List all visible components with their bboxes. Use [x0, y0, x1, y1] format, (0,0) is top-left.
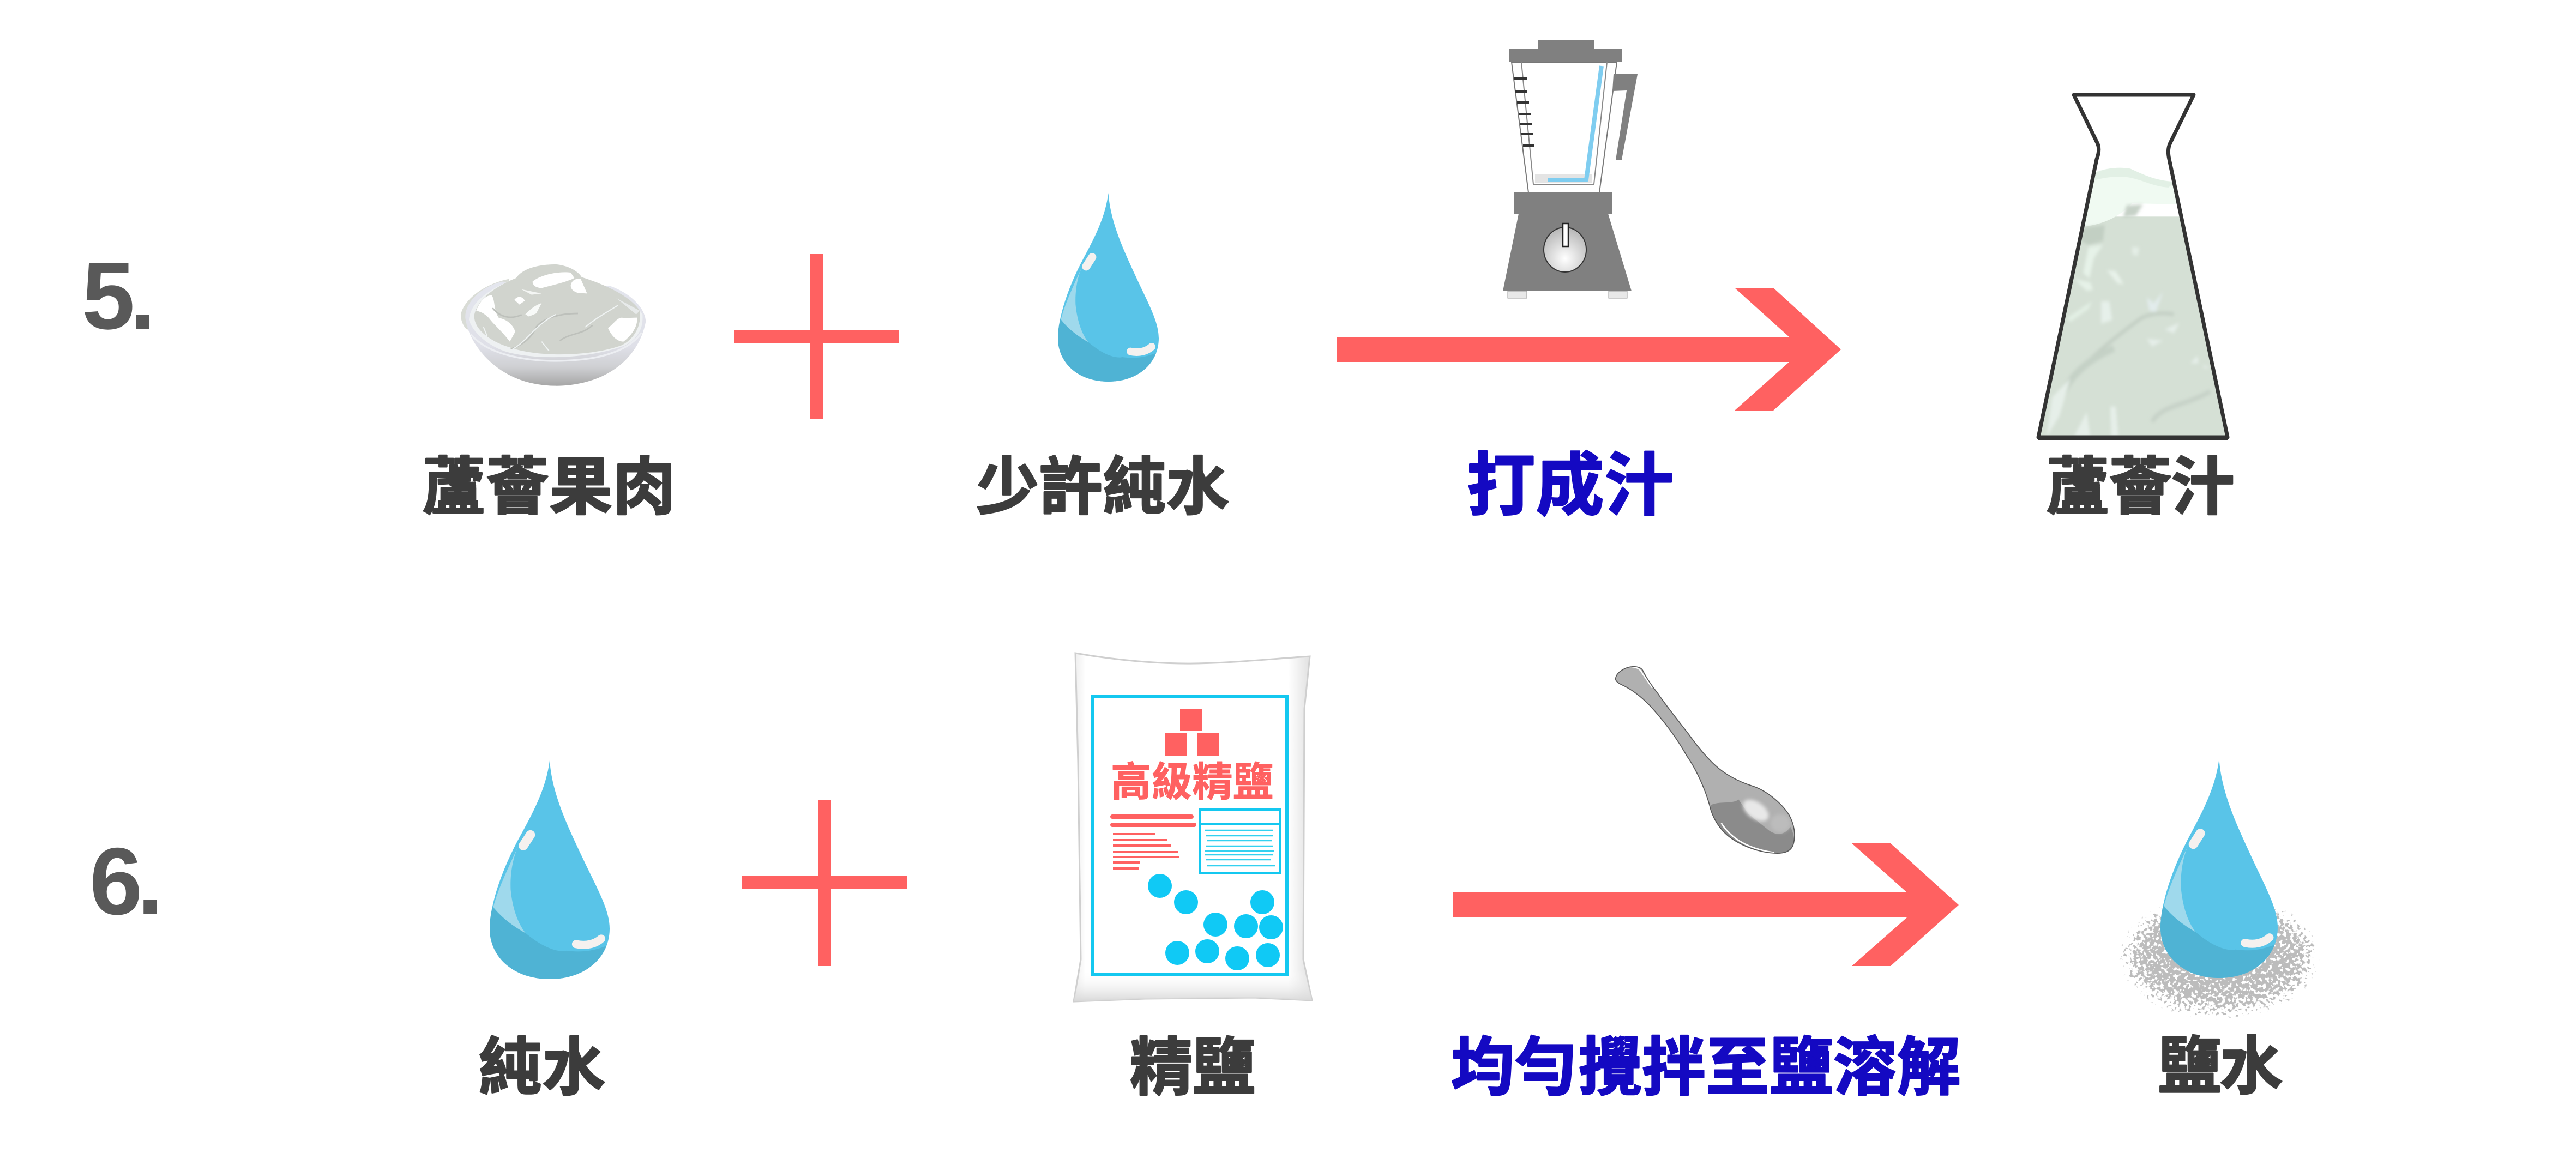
label: refined salt: 精鹽 — [1130, 1033, 1255, 1103]
icon: blender — [1503, 40, 1638, 298]
ingredient: aloe flesh in bowl — [461, 264, 646, 386]
arrow row 6 — [1453, 843, 1959, 966]
bag label frame — [1092, 697, 1287, 975]
plus sign row 5 — [734, 254, 899, 419]
icon: spoon — [1616, 667, 1795, 853]
label: blend into juice: 打成汁 — [1467, 448, 1673, 524]
label: aloe juice: 蘆薈汁 — [2047, 452, 2234, 522]
label: salt water: 鹽水 — [2158, 1032, 2283, 1102]
water drop — [2159, 759, 2279, 980]
step number 6: 6. — [89, 829, 164, 935]
step number 5: 5. — [82, 243, 156, 349]
red text lines — [1112, 817, 1194, 868]
plus sign row 6 — [742, 800, 907, 966]
water drop row 5 — [1057, 193, 1160, 383]
info box — [1200, 810, 1280, 873]
bag title: 高級精鹽 — [1111, 759, 1273, 805]
salt pile — [2116, 892, 2323, 1021]
blue dots — [1148, 874, 1283, 970]
water drop row 6 — [489, 760, 611, 981]
label: stir until salt dissolves: 均勻攪拌至鹽溶解 — [1451, 1032, 1960, 1103]
icon: salt bag — [1074, 653, 1312, 1001]
label: pure water: 純水 — [479, 1033, 605, 1103]
salt water: salt pile with drop — [2116, 759, 2323, 1021]
arrow row 5 — [1337, 288, 1841, 411]
label: a little pure water: 少許純水 — [976, 452, 1229, 522]
aloe juice bottle — [2029, 95, 2236, 438]
label: aloe flesh: 蘆薈果肉 — [423, 452, 676, 522]
logo squares — [1165, 709, 1219, 756]
